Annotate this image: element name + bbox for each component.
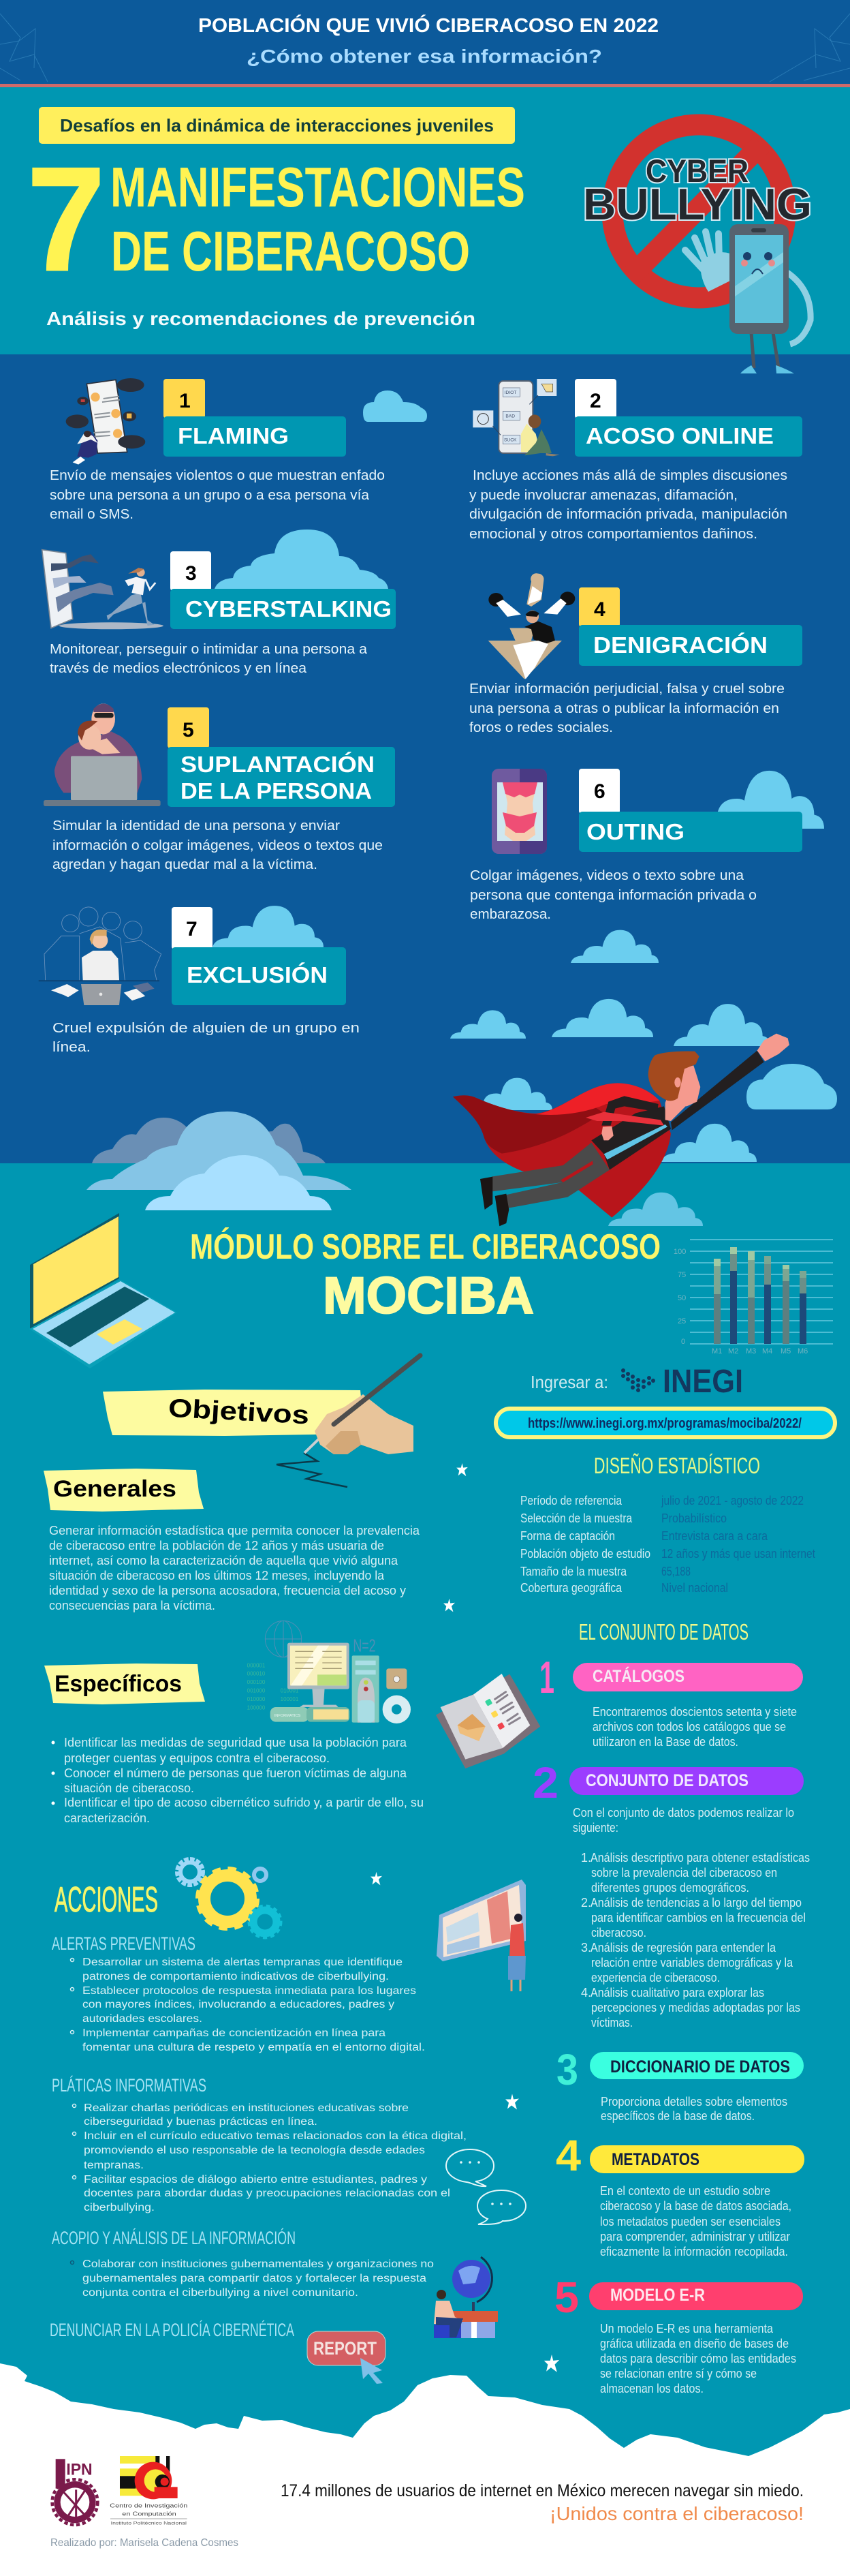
pill: DICCIONARIO DE DATOS (610, 2057, 790, 2076)
pill: CATÁLOGOS (593, 1666, 684, 1686)
number badge: 1 (179, 390, 191, 412)
illustration: woman and insults: BAD (505, 414, 515, 419)
description: Enviar información perjudicial, falsa y cruel sobre (469, 681, 785, 696)
heading: acciones (54, 1860, 281, 1937)
description: Un modelo E-R es una herramienta (600, 2322, 774, 2335)
number badge (168, 707, 209, 748)
description: gráfica utilizada en diseño de bases de (600, 2337, 789, 2350)
description: Monitorear, perseguir o intimidar a una persona a (50, 642, 368, 657)
number badge (579, 769, 620, 814)
illustration: flying superhero (453, 1034, 789, 1226)
description (593, 1705, 797, 1749)
description: Envío de mensajes violentos o que muestran enfado (50, 468, 385, 483)
pill (590, 2052, 804, 2079)
illustration: pointing hands at person (488, 573, 575, 679)
numbered list: Análisis de tendencias a lo largo del tiempo (591, 1896, 802, 1910)
description: Encontraremos doscientos setenta y siete (593, 1705, 797, 1719)
title bar: ACOSO ONLINE (586, 423, 774, 448)
data item 2: conjunto de datos (533, 1758, 810, 2029)
section: pláticas informativas (52, 2075, 467, 2213)
table: statistical design: Población objeto de estudio (520, 1547, 650, 1561)
label: específicos (44, 1663, 205, 1704)
description: datos para describir cómo las entidades (600, 2352, 796, 2365)
title bar (579, 625, 802, 666)
label: generales (44, 1469, 204, 1512)
illustration: woman and insults (473, 379, 560, 456)
bar chart: 25 (678, 1317, 686, 1325)
number badge: 2 (590, 390, 601, 412)
text block: general objective: situación de ciberacoso en los últimos 12 meses, incluyendo la (49, 1569, 385, 1582)
description (52, 818, 383, 872)
banner: desafíos: Desafíos en la dinámica de interacciones juveniles (60, 115, 494, 136)
table: statistical design: Nivel nacional (661, 1581, 728, 1595)
number badge (163, 379, 205, 418)
numbered list: para identificar cambios en la frecuencia del (591, 1911, 806, 1925)
bar chart: 50 (678, 1294, 686, 1302)
logo: inegi (621, 1364, 743, 1400)
description: En el contexto de un estudio sobre (600, 2184, 770, 2198)
list: docentes para abordar dudas y preocupaciones relacionadas con el (84, 2188, 450, 2199)
heading: acciones: ACCIONES (54, 1880, 158, 1920)
illustration: phone with insults (66, 378, 145, 465)
title bar (575, 416, 802, 457)
text block: specific objectives: situación de ciberacoso. (64, 1781, 194, 1795)
heading: ALERTAS PREVENTIVAS (52, 1933, 195, 1954)
description: archivos con todos los catálogos que se (593, 1720, 786, 1734)
list (72, 2102, 467, 2213)
description: ciberacoso y la base de datos asociada, (600, 2199, 791, 2213)
list: Incluir en el currículo educativo temas relacionados con la ética digital, (84, 2130, 467, 2142)
header (198, 14, 659, 67)
logo: CIC: Instituto Politécnico Nacional (111, 2521, 187, 2526)
clouds: lower left (86, 1111, 351, 1210)
icon: computer and books: 000100 (247, 1679, 266, 1685)
numbered list (581, 1851, 810, 2029)
description: se relacionan entre sí y cómo se (600, 2367, 757, 2380)
text block: general objective: de ciberacoso entre la población de 12 años y más usuaria de (49, 1539, 384, 1552)
panel: cyberstalking (42, 530, 396, 676)
description: agredan y hagan quedar mal a la víctima. (52, 857, 317, 872)
logo: IPN: IPN (66, 2461, 93, 2479)
description: Colgar imágenes, videos o texto sobre una (470, 868, 744, 883)
number badge (579, 587, 620, 627)
title: módulo sobre el ciberacoso: MÓDULO SOBRE EL CIBERACOSO (190, 1227, 661, 1267)
description: y puede involucrar amenazas, difamación, (469, 488, 738, 503)
list: patrones de comportamiento indicativos de ciberbullying. (82, 1971, 389, 1982)
description: línea. (52, 1040, 91, 1055)
text block: specific objectives: Identificar el tipo de acoso cibernético sufrido y, a partir de ello, su (64, 1796, 424, 1809)
list: promoviendo el uso responsable de la tecnología desde edades (84, 2145, 425, 2156)
pill: CONJUNTO DE DATOS (586, 1771, 749, 1790)
numbered list: percepciones y medidas adoptadas por las (591, 2001, 800, 2014)
numbered list: experiencia de ciberacoso. (591, 1971, 720, 1984)
description: través de medios electrónicos y en línea (50, 661, 307, 676)
heading: diseño estadístico: DISEÑO ESTADÍSTICO (594, 1453, 760, 1478)
illustration: masked person over a victim (44, 703, 161, 806)
text block: specific objectives: proteger cuentas y equipos contra el ciberacoso. (64, 1751, 330, 1765)
subtitle: ¿Cómo obtener esa información? (247, 46, 602, 67)
heading: ACOPIO Y ANÁLISIS DE LA INFORMACIÓN (52, 2227, 296, 2248)
footer: torn white paper (0, 2363, 850, 2576)
data item 3: diccionario de datos (556, 2045, 804, 2123)
list (71, 2258, 434, 2299)
title bar: DE LA PERSONA (180, 778, 372, 803)
table: statistical design: Selección de la muestra (520, 1512, 633, 1525)
pill (569, 1767, 804, 1795)
title bar: DENIGRACIÓN (593, 632, 768, 658)
star (443, 1599, 455, 1612)
banner: desafíos (39, 107, 515, 144)
numbered list: 2. (581, 1896, 591, 1910)
description (601, 2095, 787, 2123)
table: statistical design: 12 años y más que usan internet (661, 1547, 815, 1561)
subheading: Análisis y recomendaciones de prevención (46, 308, 475, 329)
pill: METADATOS (612, 2150, 699, 2169)
pill (573, 1663, 803, 1691)
description (470, 868, 757, 922)
ingresar a inegi (531, 1364, 743, 1400)
table: statistical design: 65,188 (661, 1565, 691, 1578)
section: acopio y análisis (52, 2227, 434, 2299)
description: email o SMS. (50, 507, 133, 522)
sign text (583, 153, 812, 229)
logo: inegi: INEGI (663, 1364, 743, 1400)
numbered list: víctimas. (591, 2016, 633, 2029)
illustration: excluded person (39, 907, 161, 1005)
label: específicos: Específicos (54, 1671, 182, 1697)
numbered list: Análisis de regresión para entender la (591, 1941, 776, 1954)
list: tempranas. (84, 2160, 144, 2171)
list: Desarrollar un sistema de alertas tempranas que identifique (82, 1957, 403, 1968)
list: ciberbullying. (84, 2202, 155, 2213)
heading line 2: DE CIBERACOSO (111, 219, 470, 283)
data item 1: catálogos (539, 1652, 803, 1749)
sign text: CYBER (646, 153, 749, 189)
description (50, 642, 368, 676)
logo: CIC: Centro de Investigación (110, 2502, 188, 2509)
text block: specific objectives (52, 1736, 424, 1825)
number badge: 7 (186, 918, 198, 940)
icon: computer and books: 000001 (247, 1663, 266, 1669)
title bar: EXCLUSIÓN (187, 962, 328, 987)
description: almacenan los datos. (600, 2382, 704, 2395)
bar chart: 75 (678, 1271, 686, 1279)
illustration: hands chase runner (42, 550, 163, 629)
numeral: 1 (539, 1652, 554, 1702)
bar chart (674, 1240, 833, 1355)
number badge: 3 (185, 562, 197, 585)
title bar (172, 947, 346, 1005)
star (544, 2355, 559, 2372)
description (50, 468, 385, 522)
description: emocional y otros comportamientos dañinos. (469, 527, 757, 542)
table: statistical design: Entrevista cara a cara (661, 1529, 768, 1543)
description (469, 468, 787, 542)
logo: IPN (52, 2459, 97, 2525)
numbered list: sobre la prevalencia del ciberacoso en (591, 1866, 777, 1880)
numeral: 4 (556, 2131, 581, 2180)
heading line 1: MANIFESTACIONES (110, 155, 525, 219)
description: una persona a otras o publicar la información en (469, 701, 779, 716)
title: POBLACIÓN QUE VIVIÓ CIBERACOSO EN 2022 (198, 14, 659, 37)
cloud (215, 530, 388, 589)
description: foros o redes sociales. (469, 720, 613, 735)
numeral 7: 7 (27, 136, 105, 301)
bar chart: M5 (781, 1347, 791, 1355)
label: objetivos (103, 1390, 362, 1436)
list: conjunta contra el ciberbullying a nivel comunitario. (82, 2287, 358, 2299)
title: módulo sobre el ciberacoso (190, 1227, 661, 1325)
sign text: BULLYING (583, 179, 812, 229)
title bar: OUTING (586, 819, 684, 844)
description: utilizaron en la Base de datos. (593, 1735, 738, 1749)
heading: PLÁTICAS INFORMATIVAS (52, 2075, 206, 2096)
title bar: SUPLANTACIÓN (180, 752, 375, 777)
numeral: 5 (554, 2273, 579, 2322)
label: generales: Generales (53, 1476, 176, 1502)
numbered list: 4. (581, 1986, 591, 1999)
section: alertas preventivas (52, 1933, 425, 2053)
icon: cursor arrow (360, 2358, 383, 2384)
icon: computer and books: 001000 (247, 1687, 266, 1693)
bar chart: M2 (728, 1347, 738, 1355)
list: gubernamentales para compartir datos y fortalecer la respuesta (82, 2273, 426, 2284)
star (456, 1463, 468, 1476)
numbered list: ciberacoso. (591, 1926, 646, 1939)
star (371, 1872, 382, 1885)
table: statistical design: julio de 2021 - agosto de 2022 (661, 1494, 804, 1507)
clouds: right sky (450, 930, 837, 1226)
label: objetivos: Objetivos (168, 1394, 310, 1430)
table: statistical design: Período de referencia (520, 1494, 623, 1507)
bar chart: M1 (712, 1347, 722, 1355)
pill (590, 2145, 804, 2173)
data item 5: modelo e-r (554, 2273, 803, 2395)
table: statistical design: Cobertura geográfica (520, 1581, 623, 1595)
number badge (172, 907, 212, 949)
text block: general objective: internet, así como la caracterización de aquella que vivió alguna (49, 1554, 398, 1567)
number badge (170, 551, 211, 591)
footer message: 17.4 millones de usuarios de internet en México merecen navegar sin miedo. (281, 2481, 804, 2500)
list: Implementar campañas de concientización en línea para (82, 2027, 385, 2039)
logo: CIC (110, 2456, 188, 2526)
url pill: https://www.inegi.org.mx/programas/mociba/2022/ (528, 1416, 802, 1431)
icon: hand writing with pen (103, 1355, 420, 1487)
numbered list: 1. (581, 1851, 591, 1865)
number badge (575, 379, 616, 418)
heading: el conjunto de datos: EL CONJUNTO DE DATOS (579, 1619, 749, 1644)
text block: specific objectives: caracterización. (64, 1811, 150, 1825)
number badge: 5 (183, 719, 194, 741)
text block: specific objectives: Identificar las medidas de seguridad que usa la población para (64, 1736, 407, 1749)
icon: computer and books: INFORMATICS (274, 1714, 300, 1718)
icon: laptop (29, 1213, 177, 1368)
cloud (212, 906, 324, 947)
button: report (307, 2331, 385, 2384)
text block: general objective (49, 1524, 420, 1612)
illustration: woman and insults: IDIOT (505, 390, 516, 395)
numbered list: diferentes grupos demográficos. (591, 1881, 749, 1895)
icon: computer and books: 100001 (281, 1696, 299, 1702)
bar chart: M3 (746, 1347, 756, 1355)
panel: denigración (469, 573, 802, 735)
title bar (168, 747, 395, 807)
panel: flaming (50, 378, 385, 522)
bar chart: M4 (762, 1347, 772, 1355)
cloud (363, 390, 427, 422)
star (505, 2094, 519, 2110)
list: Realizar charlas periódicas en instituciones educativas sobre (84, 2102, 409, 2114)
numeral: 3 (556, 2045, 578, 2094)
numeral: 2 (533, 1758, 558, 1807)
panel: outing (470, 769, 824, 922)
illustration: phone with private image (492, 769, 547, 854)
list: ciberseguridad y buenas prácticas en línea. (84, 2116, 317, 2128)
pill (589, 2282, 803, 2310)
description: persona que contenga información privada o (470, 888, 757, 903)
text block: general objective: consecuencias para la víctima. (49, 1599, 215, 1612)
description: divulgación de información privada, manipulación (469, 507, 787, 522)
logo: CIC: en Computación (122, 2511, 176, 2517)
title: mociba: MOCIBA (323, 1267, 534, 1325)
description: siguiente: (573, 1821, 618, 1835)
credit: Realizado por: Marisela Cadena Cosmes (50, 2537, 238, 2549)
numbered list: Análisis descriptivo para obtener estadísticas (591, 1851, 810, 1865)
icon: computer and books: N=2 (353, 1635, 376, 1655)
description: información o colgar imágenes, videos o textos que (52, 838, 383, 853)
url pill (496, 1409, 835, 1437)
description (600, 2184, 791, 2258)
button: report: REPORT (313, 2338, 377, 2359)
icon: computer and books (247, 1621, 411, 1723)
text block: general objective: Generar información estadística que permita conocer la prevalencia (49, 1524, 420, 1537)
icon: computer and books: 010000 (247, 1696, 266, 1702)
description: Cruel expulsión de alguien de un grupo en (52, 1021, 360, 1036)
ingresar a inegi: Ingresar a: (531, 1372, 608, 1392)
description: Con el conjunto de datos podemos realizar lo (573, 1806, 794, 1820)
data item 4: metadatos (556, 2131, 804, 2258)
list: Colaborar con instituciones gubernamentales y organizaciones no (82, 2258, 434, 2270)
description: para comprender, administrar y utilizar (600, 2230, 790, 2243)
panel: suplantación (44, 703, 395, 872)
description: específicos de la base de datos. (601, 2109, 755, 2123)
title bar: CYBERSTALKING (185, 596, 392, 622)
description: sobre una persona a un grupo o a esa persona vía (50, 488, 370, 503)
link: denunciar (50, 2320, 385, 2384)
table: statistical design: Forma de captación (520, 1529, 615, 1543)
title bar (170, 589, 396, 629)
description (573, 1806, 794, 1835)
number badge: 4 (594, 598, 605, 621)
illustration: woman and insults: SUCK (504, 438, 517, 442)
description: Proporciona detalles sobre elementos (601, 2095, 787, 2109)
description (469, 681, 785, 735)
icon: computer and books: 100000 (247, 1704, 266, 1711)
numbered list: relación entre variables demográficas y la (591, 1956, 793, 1969)
list: Facilitar espacios de diálogo abierto entre estudiantes, padres y (84, 2174, 427, 2186)
icon: computer and books: 000010 (247, 1671, 266, 1677)
bar chart: 0 (681, 1338, 685, 1346)
icon: open book (436, 1674, 540, 1768)
cloud (699, 771, 824, 829)
description: eficazmente la información recopilada. (600, 2245, 788, 2258)
panel: exclusión (39, 906, 360, 1055)
numbered list: 3. (581, 1941, 591, 1954)
description: embarazosa. (470, 907, 551, 922)
title bar (579, 812, 802, 852)
icon: cyberbullying prohibition with sad phone (583, 125, 812, 373)
icon: computer and books: 010001 (281, 1687, 299, 1693)
text block: general objective: identidad y sexo de la persona acosadora, frecuencia del acoso y (49, 1584, 406, 1597)
icon: gears (178, 1860, 281, 1937)
table: statistical design: Probabilístico (661, 1512, 727, 1525)
footer message (281, 2481, 804, 2524)
panel: acoso online (469, 379, 802, 542)
number badge: 6 (594, 780, 605, 803)
description (52, 1021, 360, 1055)
bar chart: 100 (674, 1248, 686, 1256)
icon: globe and books with reader (434, 2257, 498, 2338)
numbered list: Análisis cualitativo para explorar las (591, 1986, 764, 1999)
slogan: ¡Unidos contra el ciberacoso! (550, 2503, 804, 2524)
title bar: FLAMING (178, 423, 289, 448)
table: statistical design: Tamaño de la muestra (520, 1565, 627, 1578)
list (71, 1957, 425, 2053)
list: fomentar una cultura de respeto y empatía en el entorno digital. (82, 2042, 425, 2053)
bar chart: M6 (798, 1347, 808, 1355)
table: statistical design (520, 1494, 815, 1595)
main heading (27, 136, 525, 301)
icon: dashboard with woman (437, 1880, 526, 1991)
description (600, 2322, 796, 2395)
list: Establecer protocolos de respuesta inmediata para los lugares (82, 1985, 416, 1997)
description: Incluye acciones más allá de simples discusiones (473, 468, 787, 483)
description: Simular la identidad de una persona y enviar (52, 818, 340, 833)
icon: speech bubbles (446, 2149, 526, 2224)
title bar (163, 416, 346, 457)
pill: MODELO E-R (610, 2286, 705, 2305)
list: con mayores índices, involucrando a educadores, padres y (82, 1999, 394, 2010)
link: denunciar: DENUNCIAR EN LA POLICÍA CIBERNÉTICA (50, 2320, 294, 2340)
description: los metadatos pueden ser esenciales (600, 2215, 781, 2228)
phone character (685, 224, 810, 373)
text block: specific objectives: Conocer el número de personas que fueron víctimas de alguna (64, 1766, 407, 1780)
list: autoridades escolares. (82, 2013, 202, 2025)
